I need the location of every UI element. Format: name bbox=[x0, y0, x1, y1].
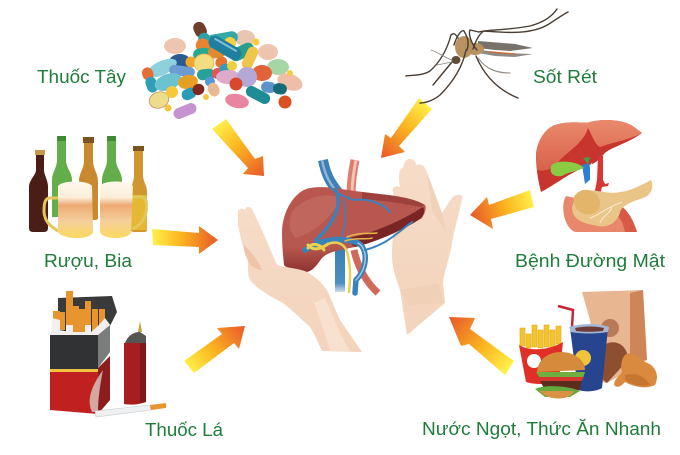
icon: fast food bbox=[519, 290, 657, 399]
bottle: brown bbox=[29, 151, 48, 232]
arrow: fast food to liver bbox=[449, 317, 514, 375]
cigarettes bbox=[53, 291, 105, 335]
beer mug: right bbox=[132, 197, 146, 229]
pill: teal red capsule bbox=[197, 67, 227, 81]
label: Nước Ngọt, Thức Ăn Nhanh: Nước Ngọt, Thức Ăn Nhanh bbox=[422, 418, 661, 439]
pill: blue maroon capsule bbox=[180, 82, 206, 102]
label: Sốt Rét: Sốt Rét bbox=[533, 66, 597, 87]
icon: liver bbox=[282, 187, 426, 293]
icon: mosquito bbox=[406, 9, 568, 103]
icon: liver and pancreas bbox=[536, 120, 652, 232]
arrow: pills to liver bbox=[212, 119, 264, 176]
icon: pills bbox=[140, 20, 305, 121]
bottle: amber bbox=[79, 138, 98, 220]
pill: teal capsule bbox=[244, 84, 272, 106]
label: Bệnh Đường Mật: Bệnh Đường Mật bbox=[515, 250, 665, 271]
pill: blue dark capsule bbox=[260, 81, 288, 95]
arrow: tobacco to liver bbox=[184, 326, 245, 373]
arrow: malaria to liver bbox=[381, 98, 432, 158]
arrow: alcohol to liver bbox=[152, 226, 218, 254]
pill: orange blue capsule bbox=[213, 54, 235, 80]
bottle: amber right bbox=[131, 147, 147, 232]
label: Thuốc Tây: Thuốc Tây bbox=[37, 66, 127, 87]
pill: teal capsule back bbox=[205, 30, 239, 48]
pill: periwinkle capsule bbox=[168, 64, 196, 78]
beer mug: left bbox=[44, 198, 58, 231]
pill: yellow capsule bbox=[240, 45, 260, 71]
icon: beer bottles and mugs bbox=[29, 136, 147, 238]
pill: teal right capsule bbox=[227, 41, 257, 63]
bottle: green right bbox=[102, 136, 122, 215]
label: Rượu, Bia: Rượu, Bia bbox=[44, 250, 133, 271]
pill: brown teal capsule bbox=[191, 20, 215, 52]
pill: blue peach capsule bbox=[203, 75, 222, 98]
arrow: biliary disease to liver bbox=[470, 190, 534, 229]
pill: green teal capsule bbox=[192, 45, 227, 61]
icon: cigarette pack and lighter bbox=[50, 291, 166, 417]
label: Thuốc Lá: Thuốc Lá bbox=[145, 419, 224, 440]
pill: orange capsule bbox=[193, 36, 212, 55]
bottle: green left bbox=[52, 136, 72, 217]
icon: vessels bbox=[322, 160, 378, 293]
pill: lilac capsule bbox=[172, 101, 198, 121]
pill: large blue capsule bbox=[206, 33, 244, 63]
icon: left hand bbox=[238, 207, 362, 352]
icon: right hand bbox=[392, 159, 462, 335]
pill: orange teal capsule bbox=[140, 66, 160, 94]
